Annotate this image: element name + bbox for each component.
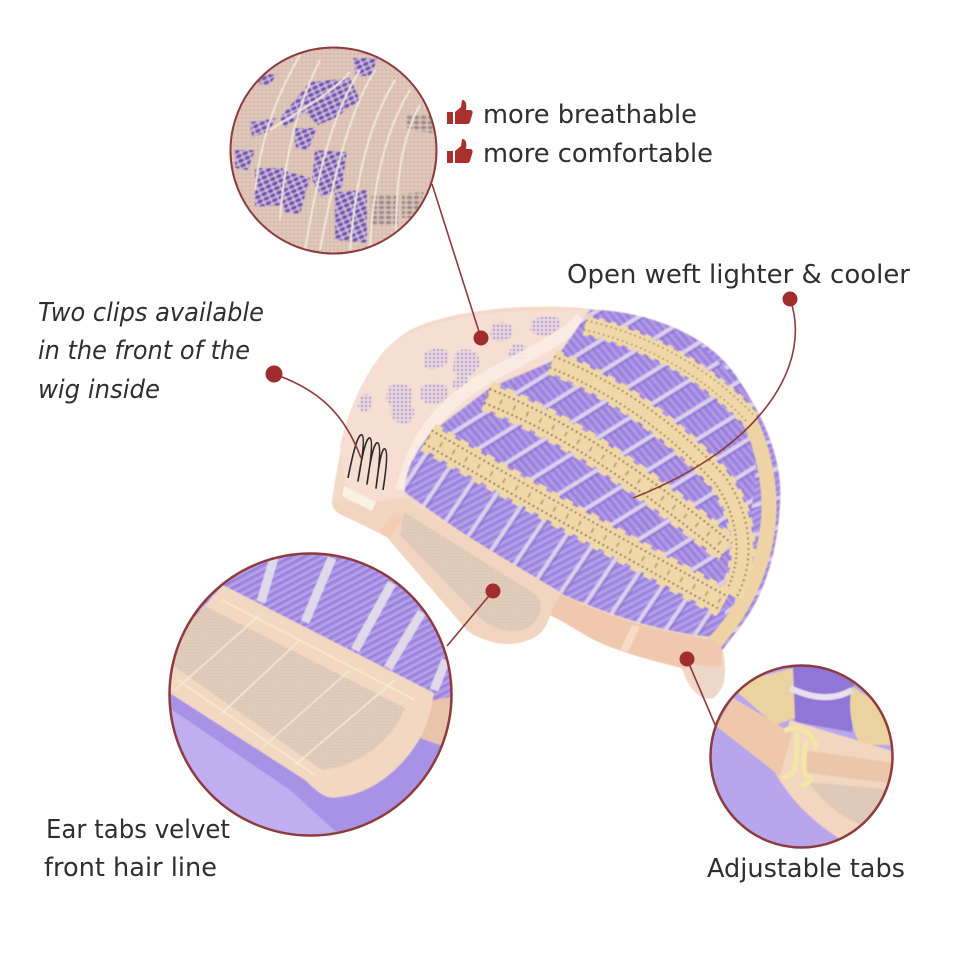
dot: clips bbox=[266, 366, 282, 382]
open weft label: Open weft lighter & cooler bbox=[567, 260, 910, 290]
icon: thumbs up bbox=[447, 139, 473, 163]
dot: open weft bbox=[782, 292, 798, 306]
ribbon 4 bbox=[428, 437, 724, 603]
dot: lace bbox=[474, 330, 488, 346]
callout lines and dots bbox=[266, 184, 798, 727]
clips label: Two clips available bbox=[38, 298, 264, 328]
lace circle border bbox=[230, 48, 436, 254]
right edge band bbox=[712, 412, 769, 645]
hair lower bbox=[171, 694, 440, 832]
purple hair through open wefts bbox=[404, 309, 782, 650]
cap base shape bbox=[332, 307, 780, 698]
ear tabs label: Ear tabs velvet bbox=[46, 815, 230, 845]
adjustable tabs label: Adjustable tabs bbox=[707, 854, 905, 884]
peach band behind strap bbox=[775, 720, 895, 845]
velvet patch bottom right bbox=[810, 782, 885, 824]
line: open weft bbox=[633, 299, 795, 498]
icon: thumbs up bbox=[447, 100, 473, 124]
line: ear tab bbox=[447, 591, 493, 646]
small front tab bbox=[380, 512, 403, 538]
lace close-up circle bbox=[230, 46, 438, 254]
thumbs-up benefit: more comfortable bbox=[447, 139, 713, 169]
brownish mesh holes at right bbox=[370, 114, 433, 226]
line: lace bbox=[432, 184, 481, 338]
tab circle border bbox=[710, 666, 892, 848]
main wig cap illustration bbox=[332, 300, 795, 699]
band left bbox=[716, 698, 792, 776]
line: clips bbox=[274, 374, 361, 458]
lace ribbon wefts bbox=[428, 325, 769, 645]
label: more breathable bbox=[483, 100, 697, 130]
ear tab velvet bbox=[165, 606, 405, 770]
comb clip bbox=[342, 435, 387, 511]
comb teeth bbox=[348, 435, 387, 490]
dot: adjustable tab bbox=[680, 652, 694, 666]
adjustable tab close-up circle bbox=[705, 660, 900, 855]
label: more comfortable bbox=[483, 139, 713, 169]
ear tab velvet panel bbox=[332, 497, 560, 644]
hair upper bbox=[192, 554, 450, 800]
hair background bbox=[712, 668, 891, 846]
comb base bbox=[342, 486, 376, 511]
infographic canvas bbox=[38, 46, 910, 882]
elastic band bbox=[550, 594, 724, 699]
strap bbox=[801, 750, 895, 784]
line: adjustable tab bbox=[687, 659, 716, 727]
thread bbox=[790, 688, 852, 697]
ear tab outer bbox=[165, 585, 434, 798]
clips label: wig inside bbox=[38, 375, 160, 405]
ribbon 2 bbox=[552, 362, 743, 595]
ear tab close-up circle bbox=[165, 548, 460, 843]
ear circle border bbox=[170, 554, 452, 836]
lace mesh background bbox=[232, 48, 436, 252]
elastic strip bbox=[420, 696, 450, 746]
plastic hook bbox=[785, 728, 816, 785]
purple holes in lace bbox=[235, 58, 377, 243]
lace crown with purple showing through bbox=[340, 310, 587, 530]
weft threads bbox=[261, 558, 446, 690]
white weft threads bbox=[255, 55, 420, 250]
ribbon 1 bbox=[585, 325, 752, 420]
clips label: in the front of the bbox=[38, 336, 250, 366]
clips label bbox=[38, 298, 264, 405]
ear tabs label bbox=[44, 815, 230, 883]
ribbon 3 bbox=[487, 396, 727, 549]
thumbs-up benefit: more breathable bbox=[447, 100, 697, 130]
lace pieces bbox=[735, 668, 795, 725]
dot: ear tab bbox=[486, 584, 500, 598]
ear tabs label: front hair line bbox=[44, 853, 217, 883]
stitches bbox=[175, 600, 415, 775]
